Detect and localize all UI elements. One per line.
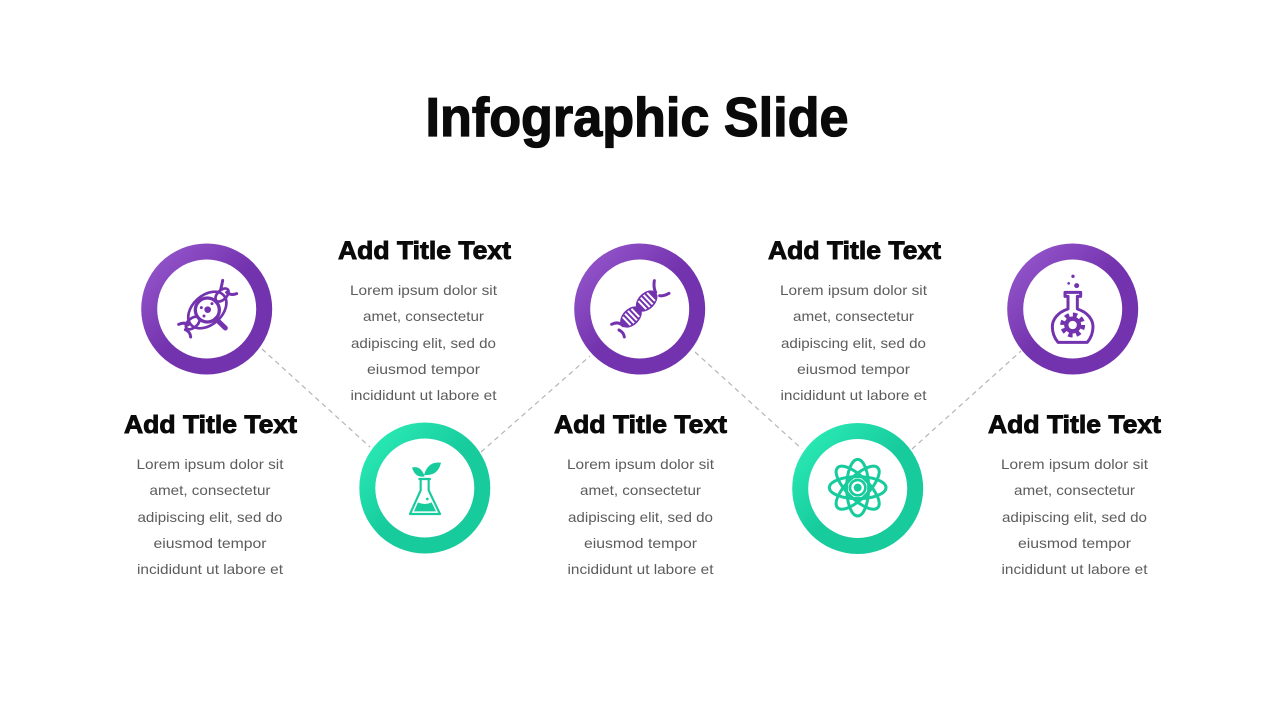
step 2 ring	[359, 422, 490, 554]
step 4 ring	[792, 423, 923, 554]
step 3 ring	[574, 244, 705, 374]
text block 2: eiusmod tempor	[367, 361, 480, 377]
text block 1: Add Title Text	[124, 411, 298, 439]
text block 5	[988, 411, 1162, 577]
text block 3: eiusmod tempor	[584, 535, 697, 551]
text block 2: incididunt ut labore et	[350, 387, 497, 403]
text block 5: Lorem ipsum dolor sit	[1001, 456, 1148, 472]
icon: DNA under magnifier	[179, 280, 237, 337]
text block 5: amet, consectetur	[1014, 482, 1135, 498]
text block 4: incididunt ut labore et	[780, 387, 927, 403]
text block 1: eiusmod tempor	[154, 535, 267, 551]
text block 2: Lorem ipsum dolor sit	[350, 282, 497, 298]
text block 1	[124, 411, 298, 577]
text block 3	[554, 411, 728, 577]
text block 1: amet, consectetur	[150, 482, 271, 498]
text block 5: Add Title Text	[988, 411, 1162, 439]
icon: DNA helix	[612, 281, 669, 337]
text block 4: Add Title Text	[768, 237, 942, 265]
text block 5: incididunt ut labore et	[1002, 561, 1148, 577]
text block 4: eiusmod tempor	[797, 361, 910, 377]
text block 3: amet, consectetur	[580, 482, 701, 498]
text block 1: Lorem ipsum dolor sit	[136, 456, 284, 472]
step 5 ring	[1007, 244, 1138, 374]
text block 2	[338, 237, 512, 403]
text block 3: adipiscing elit, sed do	[568, 509, 713, 525]
connector lines	[262, 349, 1021, 452]
text block 4: adipiscing elit, sed do	[781, 335, 926, 351]
text block 4: Lorem ipsum dolor sit	[780, 282, 927, 298]
text block 5: eiusmod tempor	[1018, 535, 1131, 551]
text block 2: Add Title Text	[338, 237, 512, 265]
icon: atom	[829, 459, 886, 516]
text block 5: adipiscing elit, sed do	[1002, 509, 1147, 525]
icon: flask with gear	[1052, 275, 1093, 342]
text block 1: adipiscing elit, sed do	[138, 509, 283, 525]
text block 3: Add Title Text	[554, 411, 728, 439]
title: Infographic Slide	[426, 86, 848, 148]
icon: flask with leaves	[410, 462, 441, 514]
text block 1: incididunt ut labore et	[137, 561, 283, 577]
step 1 ring	[141, 244, 272, 374]
text block 2: amet, consectetur	[363, 308, 484, 324]
text block 2: adipiscing elit, sed do	[351, 335, 496, 351]
text block 4: amet, consectetur	[793, 308, 914, 324]
text block 3: incididunt ut labore et	[568, 561, 714, 577]
text block 3: Lorem ipsum dolor sit	[567, 456, 714, 472]
text block 4	[768, 237, 942, 403]
